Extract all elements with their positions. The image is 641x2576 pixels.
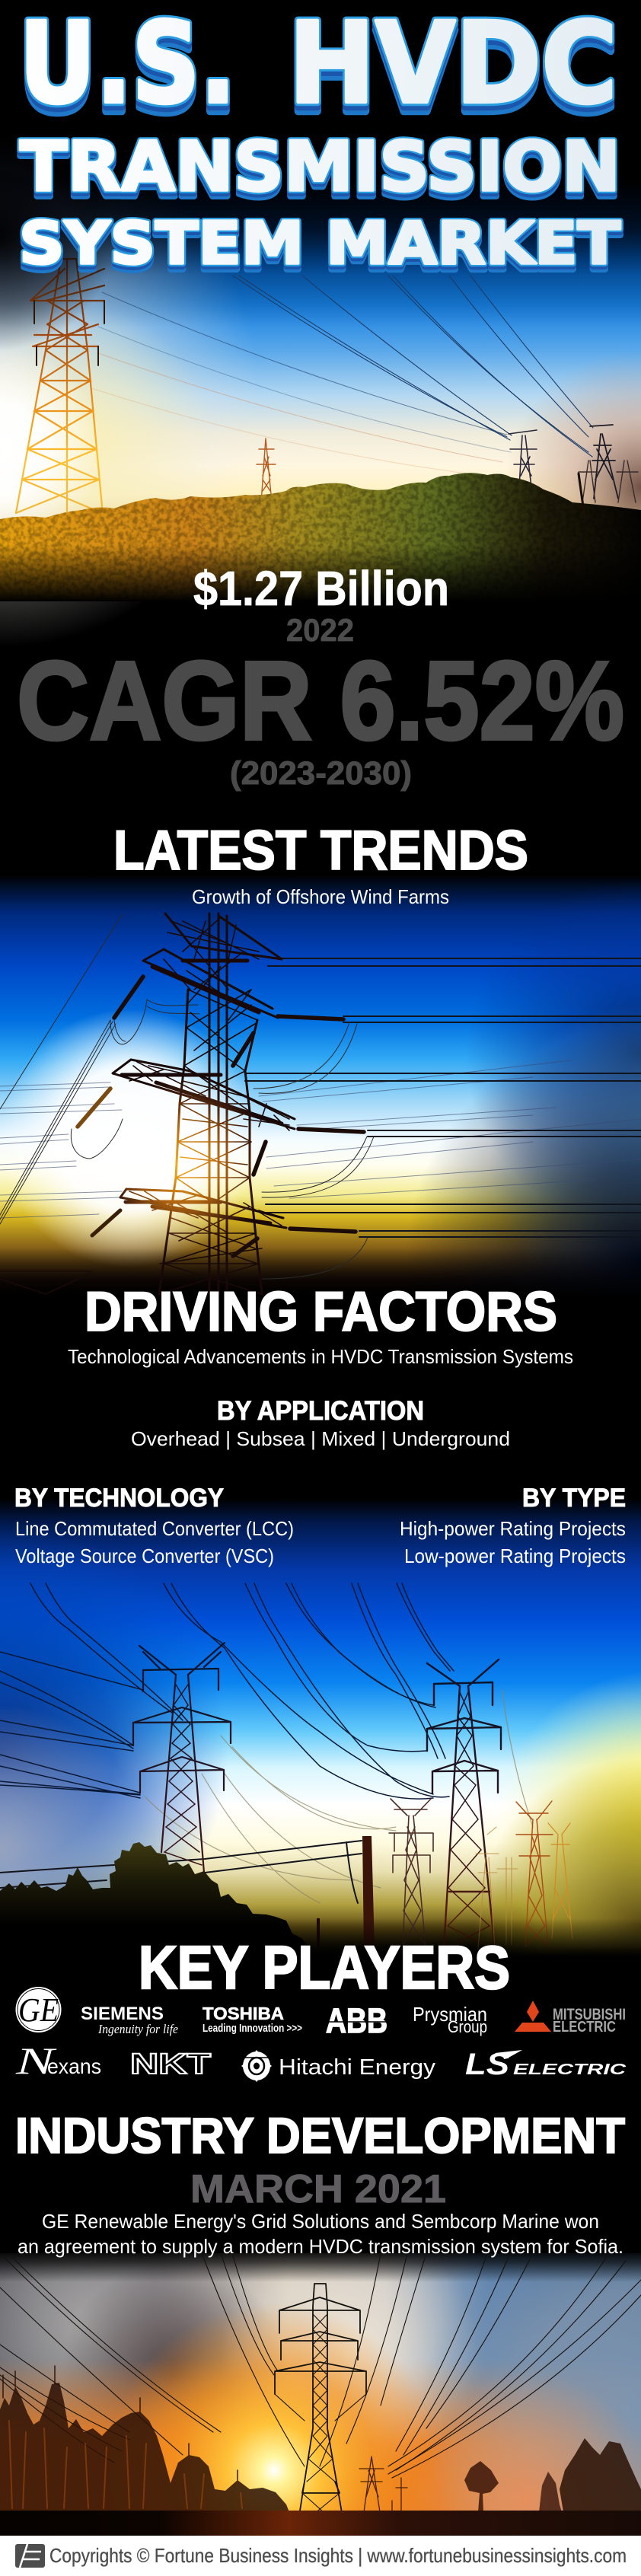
- by technology group: [14, 1484, 294, 1567]
- by technology heading: BY TECHNOLOGY: [14, 1484, 224, 1513]
- title: U.S. HVDC: HVDC: [289, 8, 617, 138]
- by application group: [131, 1396, 510, 1450]
- logo: Prysmian Group: Prysmian: [413, 2003, 487, 2026]
- by type group: [400, 1484, 626, 1567]
- title: TRANSMISSION: TRANSMISSION: [20, 130, 620, 210]
- development text line 1: GE Renewable Energy's Grid Solutions and Sembcorp Marine won: [42, 2210, 599, 2233]
- photo: row of pylons under blue sky: [0, 1484, 641, 1956]
- logo: ABB: ABB: [326, 2001, 387, 2040]
- by application heading: BY APPLICATION: [217, 1396, 424, 1426]
- trend text: Growth of Offshore Wind Farms: [192, 885, 449, 908]
- logo: NKT: NKT: [130, 2048, 211, 2080]
- logo: Siemens: SIEMENS: [81, 2004, 164, 2024]
- development text line 2: an agreement to supply a modern HVDC transmission system for Sofia.: [18, 2235, 623, 2258]
- title: U.S. HVDC: U.S.: [19, 0, 236, 129]
- logo: GE: GE: [18, 1991, 59, 2029]
- technology item: VSC: Voltage Source Converter (VSC): [15, 1545, 274, 1567]
- title: SYSTEM MARKET: SYSTEM MARKET: [19, 210, 621, 278]
- footer bar: [0, 2536, 641, 2576]
- title: SYSTEM MARKET: SYSTEM MARKET: [19, 210, 621, 278]
- photo: close-up pylon against sun: [0, 875, 641, 1302]
- heading: latest trends: LATEST TRENDS: [113, 820, 528, 882]
- logo: Prysmian Group: [413, 2003, 487, 2036]
- by type heading: BY TYPE: [522, 1484, 626, 1513]
- photo: pylon at sunset: [0, 2249, 641, 2536]
- by application items: Overhead | Subsea | Mixed | Underground: [131, 1427, 510, 1450]
- title: TRANSMISSION: TRANSMISSION: [20, 127, 620, 207]
- photo: treeline below first photo: [0, 472, 641, 601]
- title: SYSTEM MARKET: SYSTEM MARKET: [19, 216, 621, 284]
- logo: Toshiba: TOSHIBA: [203, 2004, 284, 2023]
- title: SYSTEM MARKET: SYSTEM MARKET: [19, 213, 621, 281]
- development date: MARCH 2021: [190, 2167, 446, 2211]
- logo: Toshiba: Leading Innovation >>>: [203, 2022, 302, 2035]
- market size value: $1.27 Billion: [193, 561, 449, 616]
- logo: Siemens: Ingenuity for life: [97, 2022, 178, 2036]
- logo: Nexans: [15, 2039, 101, 2082]
- title: TRANSMISSION: TRANSMISSION: [20, 127, 620, 207]
- CAGR period: (2023-2030): [230, 755, 412, 792]
- logo: Nexans: exans: [47, 2055, 101, 2078]
- logo: Siemens: [81, 2004, 178, 2036]
- logo: Prysmian Group: Group: [448, 2017, 487, 2036]
- title: TRANSMISSION: TRANSMISSION: [20, 133, 620, 213]
- title: U.S. HVDC: [19, 0, 617, 138]
- photo: power lines at sunrise with left pylon: [0, 0, 641, 647]
- title: U.S. HVDC: U.S.: [19, 8, 236, 138]
- driving factor text: Technological Advancements in HVDC Transmission Systems: [68, 1345, 573, 1368]
- type item: low power: Low-power Rating Projects: [404, 1545, 626, 1567]
- title: U.S. HVDC: U.S.: [19, 3, 236, 133]
- logo: Hitachi Energy: [241, 2050, 436, 2082]
- heading: driving factors: DRIVING FACTORS: [85, 1281, 557, 1343]
- logo: Hitachi Energy: Hitachi Energy: [279, 2055, 436, 2080]
- heading: key players: KEY PLAYERS: [139, 1934, 510, 2001]
- type item: high power: High-power Rating Projects: [400, 1517, 626, 1540]
- logo: LS Electric: [465, 2048, 627, 2081]
- logo: Mitsubishi Electric: ELECTRIC: [553, 2019, 616, 2036]
- logo: Nexans: N: [15, 2039, 57, 2082]
- logo: Toshiba: [203, 2004, 302, 2035]
- technology item: LCC: Line Commutated Converter (LCC): [15, 1517, 294, 1540]
- logo: Mitsubishi Electric: [515, 2001, 626, 2036]
- logo: LS Electric: ELECTRIC: [513, 2061, 627, 2078]
- title: U.S. HVDC: U.S.: [19, 0, 236, 129]
- title: U.S. HVDC: HVDC: [289, 0, 617, 129]
- market size year: 2022: [286, 612, 354, 648]
- title: U.S. HVDC: HVDC: [289, 0, 617, 129]
- title: U.S. HVDC: HVDC: [289, 3, 617, 133]
- footer logo: [15, 2544, 45, 2568]
- logo: LS Electric: LS: [465, 2048, 509, 2081]
